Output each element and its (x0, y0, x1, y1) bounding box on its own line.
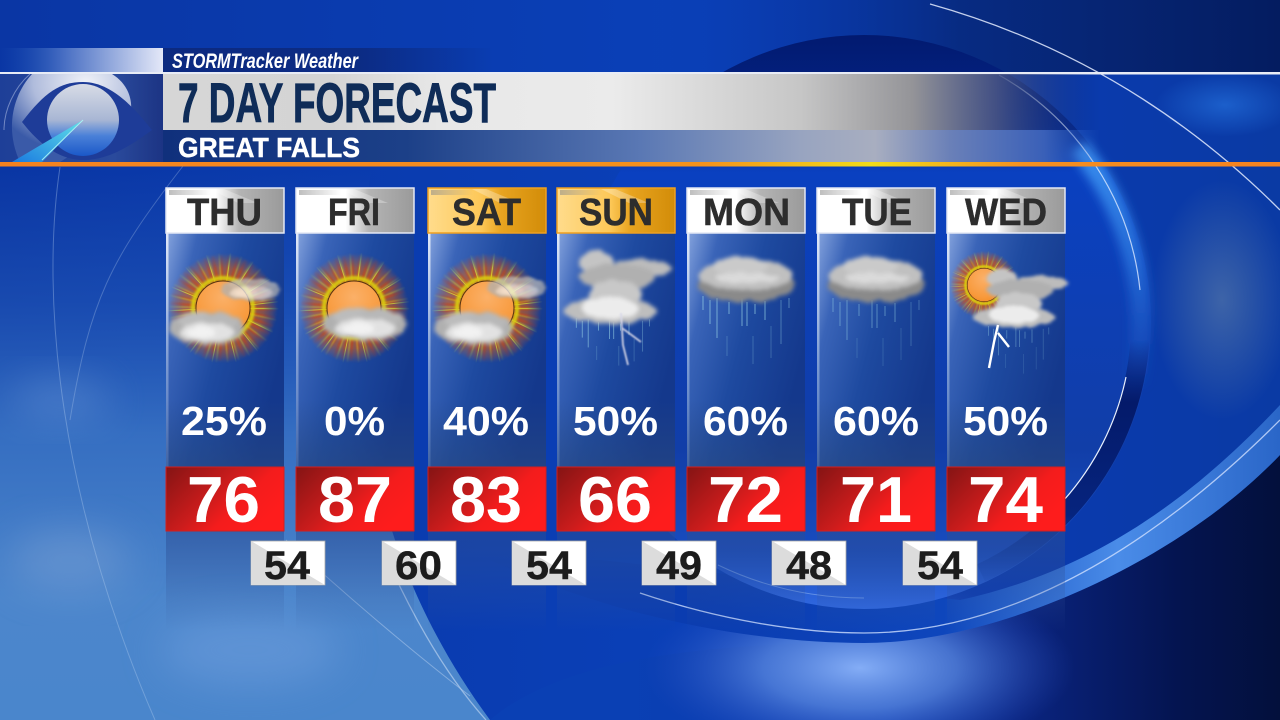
subtitle band: GREAT FALLS (163, 130, 1100, 163)
low temperature 60 (382, 541, 456, 588)
title band: 7 DAY FORECAST: 7 DAY FORECAST (178, 71, 496, 134)
header banner (0, 48, 1280, 166)
low temperature 54: 54 (526, 544, 573, 588)
day column: SUN: 66 (578, 463, 652, 536)
subtitle band: GREAT FALLS: GREAT FALLS (178, 132, 360, 163)
day column: THU (166, 188, 284, 631)
icon: rain cloud (697, 257, 795, 364)
day column: MON (687, 188, 805, 631)
day column: TUE: TUE (842, 192, 912, 234)
day column: FRI: FRI (328, 192, 380, 234)
day column: SAT: 83 (450, 463, 522, 536)
header tab: STORMTracker Weather (163, 48, 493, 73)
low temperature 48: 48 (786, 544, 832, 588)
day column: TUE: 60% (833, 398, 919, 444)
top white rule (0, 72, 1280, 74)
day column: THU: 25% (181, 398, 267, 444)
low temperature 54: 54 (264, 544, 311, 588)
day column: SUN: 50% (573, 398, 658, 444)
day column: MON: MON (703, 192, 790, 234)
day column: WED (947, 188, 1068, 631)
icon: partly cloudy (169, 267, 281, 349)
day column: SAT (428, 188, 547, 631)
day column: SAT: 40% (443, 398, 529, 444)
day column: SUN (557, 188, 675, 631)
icon: partly cloudy (434, 267, 547, 349)
icon: thunderstorm with rain (564, 251, 671, 366)
day column: FRI: 0% (324, 398, 385, 444)
header tab gradient (0, 48, 163, 72)
icon: station eye logo (0, 74, 163, 162)
day column: TUE (817, 188, 935, 631)
low temperature 54 (251, 541, 325, 588)
day column: THU: 76 (187, 463, 260, 536)
day column: WED: 74 (968, 463, 1043, 536)
header tab: STORMTracker Weather: STORMTracker Weather (172, 50, 359, 73)
day column: WED: 50% (963, 398, 1048, 444)
day column: TUE: 71 (840, 463, 912, 536)
low temperature 54 (903, 541, 977, 588)
low temperature 54: 54 (917, 544, 964, 588)
low temperature 60: 60 (395, 544, 442, 588)
icon: sun with thunderstorm (959, 260, 1068, 374)
orange rule (0, 162, 1280, 166)
day column: MON: 72 (708, 463, 783, 536)
day column: FRI: 87 (318, 463, 392, 536)
day column: FRI (296, 188, 414, 631)
low temperature 49 (642, 541, 716, 588)
day column: SAT: SAT (452, 192, 521, 234)
day column: THU: THU (187, 192, 262, 234)
low temperature 54 (512, 541, 586, 588)
low temperature 49: 49 (656, 544, 702, 588)
icon: rain cloud (827, 257, 925, 366)
day column: WED: WED (965, 192, 1047, 234)
day column: SUN: SUN (579, 192, 653, 234)
icon: mostly sunny (313, 267, 408, 349)
low temperature 48 (772, 541, 846, 588)
title band: 7 DAY FORECAST (163, 71, 1100, 134)
day column: MON: 60% (703, 398, 788, 444)
